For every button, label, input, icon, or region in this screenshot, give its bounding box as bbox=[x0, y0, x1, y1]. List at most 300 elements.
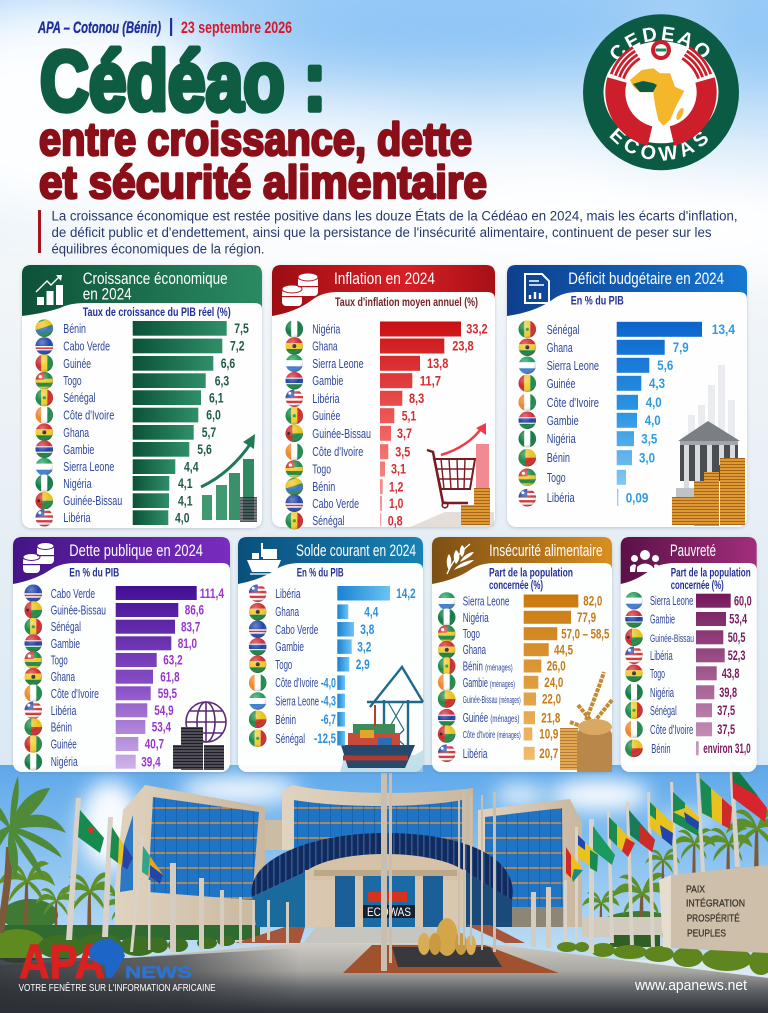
row: Gambie bbox=[24, 634, 197, 653]
row: Cabo Verde bbox=[24, 584, 224, 602]
row: Gambie: Gambie bbox=[312, 373, 343, 388]
panel: insécurité alimentaire bbox=[432, 537, 612, 772]
heading: Croissance économique bbox=[83, 269, 228, 288]
stone wall with motto: PROSPÉRITÉ bbox=[687, 912, 740, 925]
row: Ghana: 23,8 bbox=[452, 338, 474, 354]
row: Bénin bbox=[518, 449, 655, 467]
row: Libéria bbox=[24, 701, 174, 720]
row: Togo: Togo bbox=[312, 462, 331, 476]
row: Guinée-Bissau bbox=[625, 628, 746, 646]
row: Sénégal: Sénégal bbox=[275, 731, 305, 746]
row: Togo: Togo bbox=[63, 373, 82, 388]
row: Guinée: 5,1 bbox=[402, 407, 416, 423]
row: Libéria: 20,7 bbox=[539, 745, 558, 761]
row: Ghana: Ghana bbox=[275, 604, 299, 619]
row: Nigéria bbox=[285, 320, 488, 338]
row: Nigéria bbox=[24, 753, 161, 771]
row: Gambie bbox=[285, 372, 441, 390]
row: Bénin: Bénin bbox=[51, 720, 72, 734]
row: Gambie: Gambie bbox=[547, 413, 579, 428]
panel: solde courant bbox=[238, 537, 423, 772]
row: Côte d'Ivoire: Côte d'Ivoire bbox=[650, 722, 693, 737]
row: Bénin: Bénin bbox=[312, 479, 335, 494]
clouds behind building bbox=[80, 776, 720, 870]
panel: dette publique bbox=[13, 537, 230, 772]
row: Nigéria bbox=[625, 683, 737, 701]
row: Bénin: 1,2 bbox=[389, 478, 403, 494]
row: Guinée (ménages): Guinée (ménages) bbox=[463, 710, 519, 725]
row: Côte d'Ivoire: Côte d'Ivoire bbox=[63, 408, 114, 422]
row: Libéria: Libéria bbox=[63, 510, 91, 525]
row: Sénégal bbox=[285, 512, 403, 530]
row: Sierra Leone: Sierra Leone bbox=[312, 356, 364, 371]
row: Sénégal: 0,8 bbox=[388, 512, 403, 528]
row: Ghana: Ghana bbox=[63, 425, 89, 440]
intro paragraph bbox=[38, 208, 738, 256]
tagline: VOTRE FENÊTRE SUR L'INFORMATION AFRICAINE bbox=[19, 981, 216, 994]
row: Côte d'Ivoire: 4,0 bbox=[646, 394, 662, 410]
row: Sénégal: 37,5 bbox=[717, 702, 735, 718]
row: Côte d'Ivoire bbox=[24, 684, 177, 702]
header: croissance bbox=[22, 265, 262, 316]
row: Sénégal: Sénégal bbox=[650, 703, 677, 718]
illustration: port crane and container ship bbox=[340, 667, 423, 772]
row: Cabo Verde: 111,4 bbox=[200, 585, 224, 601]
red planter right bbox=[466, 925, 525, 943]
subheading bbox=[489, 566, 573, 592]
header: déficit bbox=[507, 265, 747, 316]
ECOWAS emblem: ECOWAS bbox=[609, 128, 708, 161]
row: Nigéria: Nigéria bbox=[63, 476, 92, 491]
entrance steps bbox=[303, 927, 445, 943]
row: Sierra Leone bbox=[249, 692, 345, 710]
row: Sierra Leone bbox=[285, 354, 448, 372]
subheading: concernée (%) bbox=[489, 578, 543, 592]
row: Guinée bbox=[285, 407, 416, 425]
row: Bénin bbox=[35, 317, 249, 337]
row: Sénégal bbox=[518, 320, 735, 338]
row: Guinée-Bissau: 86,6 bbox=[185, 602, 204, 618]
row: Côte d'Ivoire bbox=[625, 720, 735, 738]
row: Guinée-Bissau: Guinée-Bissau bbox=[312, 426, 371, 441]
row: Bénin (ménages): Bénin (ménages) bbox=[463, 658, 513, 674]
row: Cabo Verde: Cabo Verde bbox=[63, 338, 110, 354]
row: Ghana bbox=[285, 337, 474, 355]
photo: ECOWAS headquarters scene bbox=[0, 762, 768, 1013]
row: Ghana bbox=[249, 603, 378, 621]
row: Togo: Togo bbox=[650, 666, 665, 681]
row: Cabo Verde bbox=[285, 494, 403, 512]
row: Sénégal bbox=[24, 618, 200, 636]
row: Sierra Leone bbox=[35, 458, 199, 476]
panel: déficit budgétaire bbox=[507, 265, 747, 527]
row: Bénin bbox=[285, 476, 403, 496]
row: Nigéria: Nigéria bbox=[312, 322, 341, 336]
row: Guinée-Bissau (ménages): Guinée-Bissau (ménages) bbox=[463, 694, 521, 706]
APA News logo: APA bbox=[19, 936, 105, 989]
icon: people bbox=[630, 550, 660, 572]
main entrance: ECOWAS bbox=[367, 907, 411, 919]
row: Côte d'Ivoire: -4,0 bbox=[321, 674, 336, 690]
subheading bbox=[671, 566, 751, 592]
row: Côte d'Ivoire bbox=[249, 674, 345, 692]
header: insécurité bbox=[432, 537, 612, 584]
row: Gambie: 81,0 bbox=[178, 635, 197, 651]
row: Libéria: Libéria bbox=[275, 586, 301, 601]
panel: croissance économique bbox=[22, 265, 262, 528]
stone wall with motto: PEUPLES bbox=[687, 928, 726, 940]
panel: inflation bbox=[272, 265, 495, 530]
row: Côte d'Ivoire: Côte d'Ivoire bbox=[51, 686, 99, 701]
row: Sierra Leone: 60,0 bbox=[734, 592, 752, 608]
row: Bénin bbox=[24, 718, 171, 736]
row: Cabo Verde: 7,2 bbox=[230, 338, 245, 354]
row: Gambie (ménages) bbox=[438, 673, 563, 691]
row: Cabo Verde: 1,0 bbox=[389, 495, 403, 511]
row: Guinée (ménages): 21,8 bbox=[541, 709, 560, 725]
ECOWAS emblem: CEDEAO bbox=[610, 26, 710, 60]
row: Sierra Leone bbox=[518, 356, 673, 374]
row: Bénin: 3,0 bbox=[639, 449, 655, 465]
row: Cabo Verde: Cabo Verde bbox=[312, 496, 359, 511]
row: Nigéria: 39,8 bbox=[719, 684, 737, 700]
row: Guinée-Bissau bbox=[24, 601, 204, 619]
row: Sierra Leone: Sierra Leone bbox=[463, 594, 509, 608]
row: Sierra Leone: Sierra Leone bbox=[650, 593, 693, 608]
row: Libéria: 4,0 bbox=[175, 509, 190, 525]
row: Ghana: 5,7 bbox=[202, 424, 216, 440]
row: Bénin bbox=[625, 739, 751, 757]
row: Sénégal: Sénégal bbox=[63, 390, 96, 405]
row: Togo bbox=[625, 664, 740, 682]
row: Gambie bbox=[518, 411, 661, 430]
row: Togo: 57,0 – 58,5 bbox=[561, 625, 609, 641]
row: Togo: 43,8 bbox=[722, 665, 740, 681]
row: Libéria: Libéria bbox=[312, 391, 340, 406]
row: Sénégal bbox=[249, 729, 345, 747]
heading: Dette publique en 2024 bbox=[69, 541, 203, 560]
row: Nigéria: 3,5 bbox=[641, 430, 657, 446]
row: Libéria: Libéria bbox=[650, 648, 673, 663]
row: Nigéria: Nigéria bbox=[51, 754, 78, 769]
subheading: Taux de croissance du PIB réel (%) bbox=[83, 305, 231, 319]
row: Togo: Togo bbox=[275, 657, 292, 672]
row: Nigéria: 77,9 bbox=[577, 609, 596, 625]
row: Sierra Leone: Sierra Leone bbox=[547, 358, 599, 373]
row: Côte d'Ivoire (ménages): 10,9 bbox=[539, 726, 558, 742]
row: Côte d'Ivoire (ménages): Côte d'Ivoire (ménages) bbox=[463, 729, 521, 741]
row: Nigéria: 39,4 bbox=[141, 753, 161, 769]
row: Ghana: 4,4 bbox=[364, 603, 378, 619]
row: Nigéria: Nigéria bbox=[547, 431, 576, 446]
heading: Pauvreté bbox=[670, 541, 716, 560]
row: Ghana bbox=[35, 423, 216, 441]
row: Guinée: Guinée bbox=[312, 408, 340, 423]
subheading: En % du PIB bbox=[571, 294, 624, 308]
rotunda bbox=[251, 833, 513, 927]
row: Ghana: 61,8 bbox=[160, 668, 180, 684]
title: et sécurité alimentaire bbox=[39, 156, 487, 208]
row: Gambie: 3,2 bbox=[357, 638, 371, 654]
row: Cabo Verde: Cabo Verde bbox=[51, 586, 95, 601]
ECOWAS emblem bbox=[583, 14, 739, 170]
intro paragraph: de déficit public et d'endettement, ainsi que la persistance de l'insécurité alimentaire, continuent de peser sur les bbox=[52, 225, 712, 240]
row: Guinée-Bissau (ménages): 22,0 bbox=[542, 691, 561, 707]
row: Togo bbox=[518, 468, 626, 486]
row: Libéria bbox=[249, 584, 416, 603]
illustration: globe and dark coins bbox=[173, 702, 226, 770]
row: Guinée: Guinée bbox=[63, 356, 91, 371]
row: Gambie (ménages): 24,0 bbox=[544, 674, 563, 690]
header: dette bbox=[13, 537, 230, 584]
row: Ghana bbox=[518, 338, 689, 356]
subheading: En % du PIB bbox=[297, 566, 344, 580]
illustration: wheat, grain sack and coins bbox=[560, 672, 612, 772]
far palm trees and foliage bbox=[0, 808, 768, 945]
row: Ghana: Ghana bbox=[312, 338, 338, 354]
dateline: 23 septembre 2026 bbox=[181, 18, 292, 37]
row: Libéria bbox=[35, 509, 190, 527]
subheading: concernée (%) bbox=[671, 578, 724, 592]
row: Bénin (ménages): 26,0 bbox=[547, 658, 566, 674]
stone wall with motto bbox=[659, 865, 768, 953]
header: inflation bbox=[272, 265, 495, 316]
row: Togo bbox=[249, 655, 370, 673]
row: Bénin (ménages) bbox=[438, 657, 566, 675]
row: Gambie: 11,7 bbox=[420, 372, 441, 388]
row: Togo bbox=[24, 651, 183, 669]
connector blocks bbox=[265, 820, 285, 850]
row: Sénégal: Sénégal bbox=[312, 513, 345, 528]
row: Côte d'Ivoire: Côte d'Ivoire bbox=[547, 395, 599, 410]
row: Guinée-Bissau bbox=[35, 492, 193, 510]
right flags bbox=[531, 762, 767, 953]
header: pauvreté bbox=[621, 537, 757, 584]
row: Guinée-Bissau: Guinée-Bissau bbox=[51, 602, 106, 618]
APA News logo: NEWS bbox=[125, 963, 192, 982]
website: www.apanews.net bbox=[634, 978, 747, 994]
row: Cabo Verde: Cabo Verde bbox=[275, 622, 318, 637]
illustration: bank and coin stacks bbox=[672, 421, 745, 526]
row: Bénin bbox=[249, 710, 345, 728]
row: Sierra Leone: -4,3 bbox=[321, 693, 336, 709]
row: Libéria: 8,3 bbox=[409, 390, 424, 406]
dateline: APA – Cotonou (Bénin) bbox=[37, 18, 161, 37]
row: Gambie bbox=[249, 638, 371, 656]
row: Libéria bbox=[438, 744, 558, 763]
row: Sierra Leone: 13,8 bbox=[427, 355, 448, 371]
row: Togo bbox=[35, 372, 229, 390]
row: Bénin: 53,4 bbox=[152, 719, 171, 735]
cocoa monument bbox=[343, 918, 559, 973]
row: Guinée: 40,7 bbox=[145, 736, 164, 752]
row: Togo bbox=[285, 460, 406, 478]
row: Sénégal: Sénégal bbox=[547, 322, 579, 337]
plaza ground bbox=[0, 943, 768, 1013]
row: Guinée-Bissau bbox=[285, 424, 412, 442]
row: Nigéria: Nigéria bbox=[650, 685, 674, 700]
heading: Solde courant en 2024 bbox=[296, 541, 416, 560]
row: Libéria: 52,3 bbox=[728, 647, 746, 663]
row: Gambie: Gambie bbox=[63, 442, 94, 457]
row: Côte d'Ivoire: 59,5 bbox=[158, 685, 177, 701]
row: Libéria bbox=[285, 389, 424, 408]
row: Cabo Verde bbox=[249, 620, 374, 638]
illustration: growth bars and arrow bbox=[201, 434, 257, 522]
row: Guinée bbox=[518, 374, 665, 392]
row: Libéria: 0,09 bbox=[626, 489, 649, 505]
row: Togo bbox=[438, 625, 609, 643]
row: Ghana: Ghana bbox=[463, 642, 486, 657]
row: Côte d'Ivoire bbox=[35, 406, 221, 424]
row: Nigéria bbox=[438, 608, 596, 626]
row: Ghana: 44,5 bbox=[554, 641, 573, 657]
row: Guinée (ménages) bbox=[438, 709, 560, 727]
row: Ghana: 7,9 bbox=[673, 339, 689, 355]
row: Togo: Togo bbox=[547, 470, 566, 485]
row: Sierra Leone: Sierra Leone bbox=[63, 459, 114, 474]
row: Cabo Verde bbox=[35, 337, 245, 355]
heading: Insécurité alimentaire bbox=[489, 541, 603, 560]
icon: wheat bbox=[447, 544, 474, 574]
row: Nigéria bbox=[35, 474, 193, 492]
row: Guinée-Bissau: 3,7 bbox=[397, 425, 412, 441]
row: Gambie: 53,4 bbox=[729, 611, 747, 627]
row: Nigéria: Nigéria bbox=[463, 610, 489, 625]
row: Côte d'Ivoire: Côte d'Ivoire bbox=[275, 675, 318, 690]
row: Gambie: Gambie bbox=[650, 612, 675, 626]
row: Ghana bbox=[24, 668, 180, 686]
subheading: En % du PIB bbox=[69, 566, 120, 580]
panel: pauvreté bbox=[621, 537, 757, 772]
row: Nigéria: 4,1 bbox=[178, 475, 193, 491]
row: Côte d'Ivoire: 37,5 bbox=[717, 721, 735, 737]
row: Gambie (ménages): Gambie (ménages) bbox=[463, 675, 515, 690]
right tower bbox=[478, 799, 582, 927]
row: Sierra Leone: 82,0 bbox=[583, 593, 602, 609]
row: Guinée: 6,6 bbox=[221, 355, 235, 371]
heading bbox=[83, 269, 228, 304]
row: Guinée: Guinée bbox=[547, 376, 575, 391]
row: Togo: 2,9 bbox=[356, 656, 370, 672]
central tower bbox=[282, 785, 473, 850]
icon: coin stacks bbox=[23, 542, 54, 573]
row: Guinée-Bissau: 4,1 bbox=[178, 492, 193, 508]
row: Sierra Leone bbox=[625, 592, 752, 610]
row: Guinée-Bissau (ménages) bbox=[438, 690, 561, 708]
icon: rising bar chart bbox=[36, 275, 63, 305]
APA News logo bbox=[19, 936, 192, 989]
heading: en 2024 bbox=[83, 284, 132, 304]
row: Libéria: 54,9 bbox=[154, 702, 174, 718]
row: Gambie bbox=[35, 440, 212, 459]
left tower bbox=[90, 785, 265, 935]
left ground shadow under logo bbox=[0, 948, 300, 1013]
stone wall with motto: PAIX bbox=[686, 884, 705, 896]
row: Guinée-Bissau: Guinée-Bissau bbox=[63, 493, 122, 508]
left hedge bbox=[0, 929, 235, 963]
left palm bbox=[0, 776, 66, 933]
central flag poles bbox=[381, 773, 496, 971]
row: Côte d'Ivoire: 6,0 bbox=[206, 407, 221, 423]
row: Libéria: Libéria bbox=[547, 490, 575, 505]
row: Togo: 6,3 bbox=[215, 372, 229, 388]
row: Guinée: Guinée bbox=[51, 736, 77, 752]
row: Cabo Verde: 3,8 bbox=[360, 621, 374, 637]
row: Côte d'Ivoire (ménages) bbox=[438, 725, 558, 743]
row: Guinée bbox=[35, 354, 235, 372]
title: entre croissance, dette bbox=[39, 113, 472, 165]
illustration: faint rising bars bbox=[688, 365, 735, 445]
row: Côte d'Ivoire: Côte d'Ivoire bbox=[312, 444, 363, 459]
row: Togo: Togo bbox=[51, 652, 68, 668]
row: Sierra Leone bbox=[438, 592, 602, 610]
row: Sierra Leone: 5,6 bbox=[657, 357, 673, 373]
row: Libéria: 14,2 bbox=[396, 585, 416, 601]
row: Gambie bbox=[625, 610, 747, 628]
row: Guinée bbox=[24, 735, 164, 753]
header: solde bbox=[238, 537, 423, 584]
row: Nigéria bbox=[518, 430, 657, 448]
intro paragraph: équilibres économiques de la région. bbox=[52, 242, 264, 256]
row: Gambie: Gambie bbox=[275, 639, 304, 654]
row: Bénin: 7,5 bbox=[234, 320, 249, 336]
row: Sierra Leone: Sierra Leone bbox=[275, 694, 319, 708]
icon: coin stacks bbox=[282, 273, 318, 306]
title bbox=[39, 34, 487, 208]
icon: financial document bbox=[525, 274, 549, 303]
row: Togo: 3,1 bbox=[391, 461, 406, 477]
title: Cédéao : bbox=[40, 34, 326, 128]
row: Sénégal bbox=[35, 389, 224, 407]
row: Libéria bbox=[625, 646, 746, 665]
row: Libéria bbox=[518, 489, 649, 507]
heading: Inflation en 2024 bbox=[334, 269, 435, 288]
icon: cargo ship bbox=[247, 543, 281, 574]
row: Côte d'Ivoire: 3,5 bbox=[395, 443, 410, 459]
illustration: shopping cart, arrow and coins bbox=[410, 423, 494, 527]
row: Gambie: 5,6 bbox=[197, 441, 212, 457]
row: Sénégal: Sénégal bbox=[51, 619, 81, 634]
row: Côte d'Ivoire bbox=[285, 443, 410, 461]
row: Sénégal: 13,4 bbox=[712, 321, 735, 337]
row: Ghana bbox=[438, 641, 573, 659]
main entrance bbox=[305, 854, 466, 928]
row: Sénégal: 83,7 bbox=[181, 618, 200, 634]
row: Ghana: Ghana bbox=[547, 340, 573, 355]
subheading: Taux d'inflation moyen annuel (%) bbox=[335, 295, 478, 309]
row: Bénin: Bénin bbox=[275, 712, 296, 727]
row: Libéria: Libéria bbox=[51, 703, 77, 718]
heading: Déficit budgétaire en 2024 bbox=[568, 269, 724, 288]
row: Guinée-Bissau: Guinée-Bissau bbox=[650, 633, 694, 645]
row: Bénin: Bénin bbox=[547, 450, 570, 465]
row: Guinée: 4,3 bbox=[649, 375, 665, 391]
row: Ghana: Ghana bbox=[51, 669, 75, 684]
row: Gambie: Gambie bbox=[51, 636, 80, 651]
row: Libéria: Libéria bbox=[463, 746, 488, 761]
row: Guinée-Bissau: 50,5 bbox=[728, 629, 746, 645]
row: Sierra Leone: 4,4 bbox=[184, 458, 199, 474]
right hedge bbox=[557, 935, 768, 975]
row: Gambie: 4,0 bbox=[645, 412, 661, 428]
subheading: Part de la population bbox=[489, 566, 573, 580]
left flags bbox=[66, 798, 289, 952]
row: Sénégal bbox=[625, 701, 735, 719]
row: Côte d'Ivoire bbox=[518, 393, 662, 411]
row: Bénin: Bénin bbox=[651, 741, 671, 756]
stone wall with motto: INTÉGRATION bbox=[686, 897, 745, 910]
